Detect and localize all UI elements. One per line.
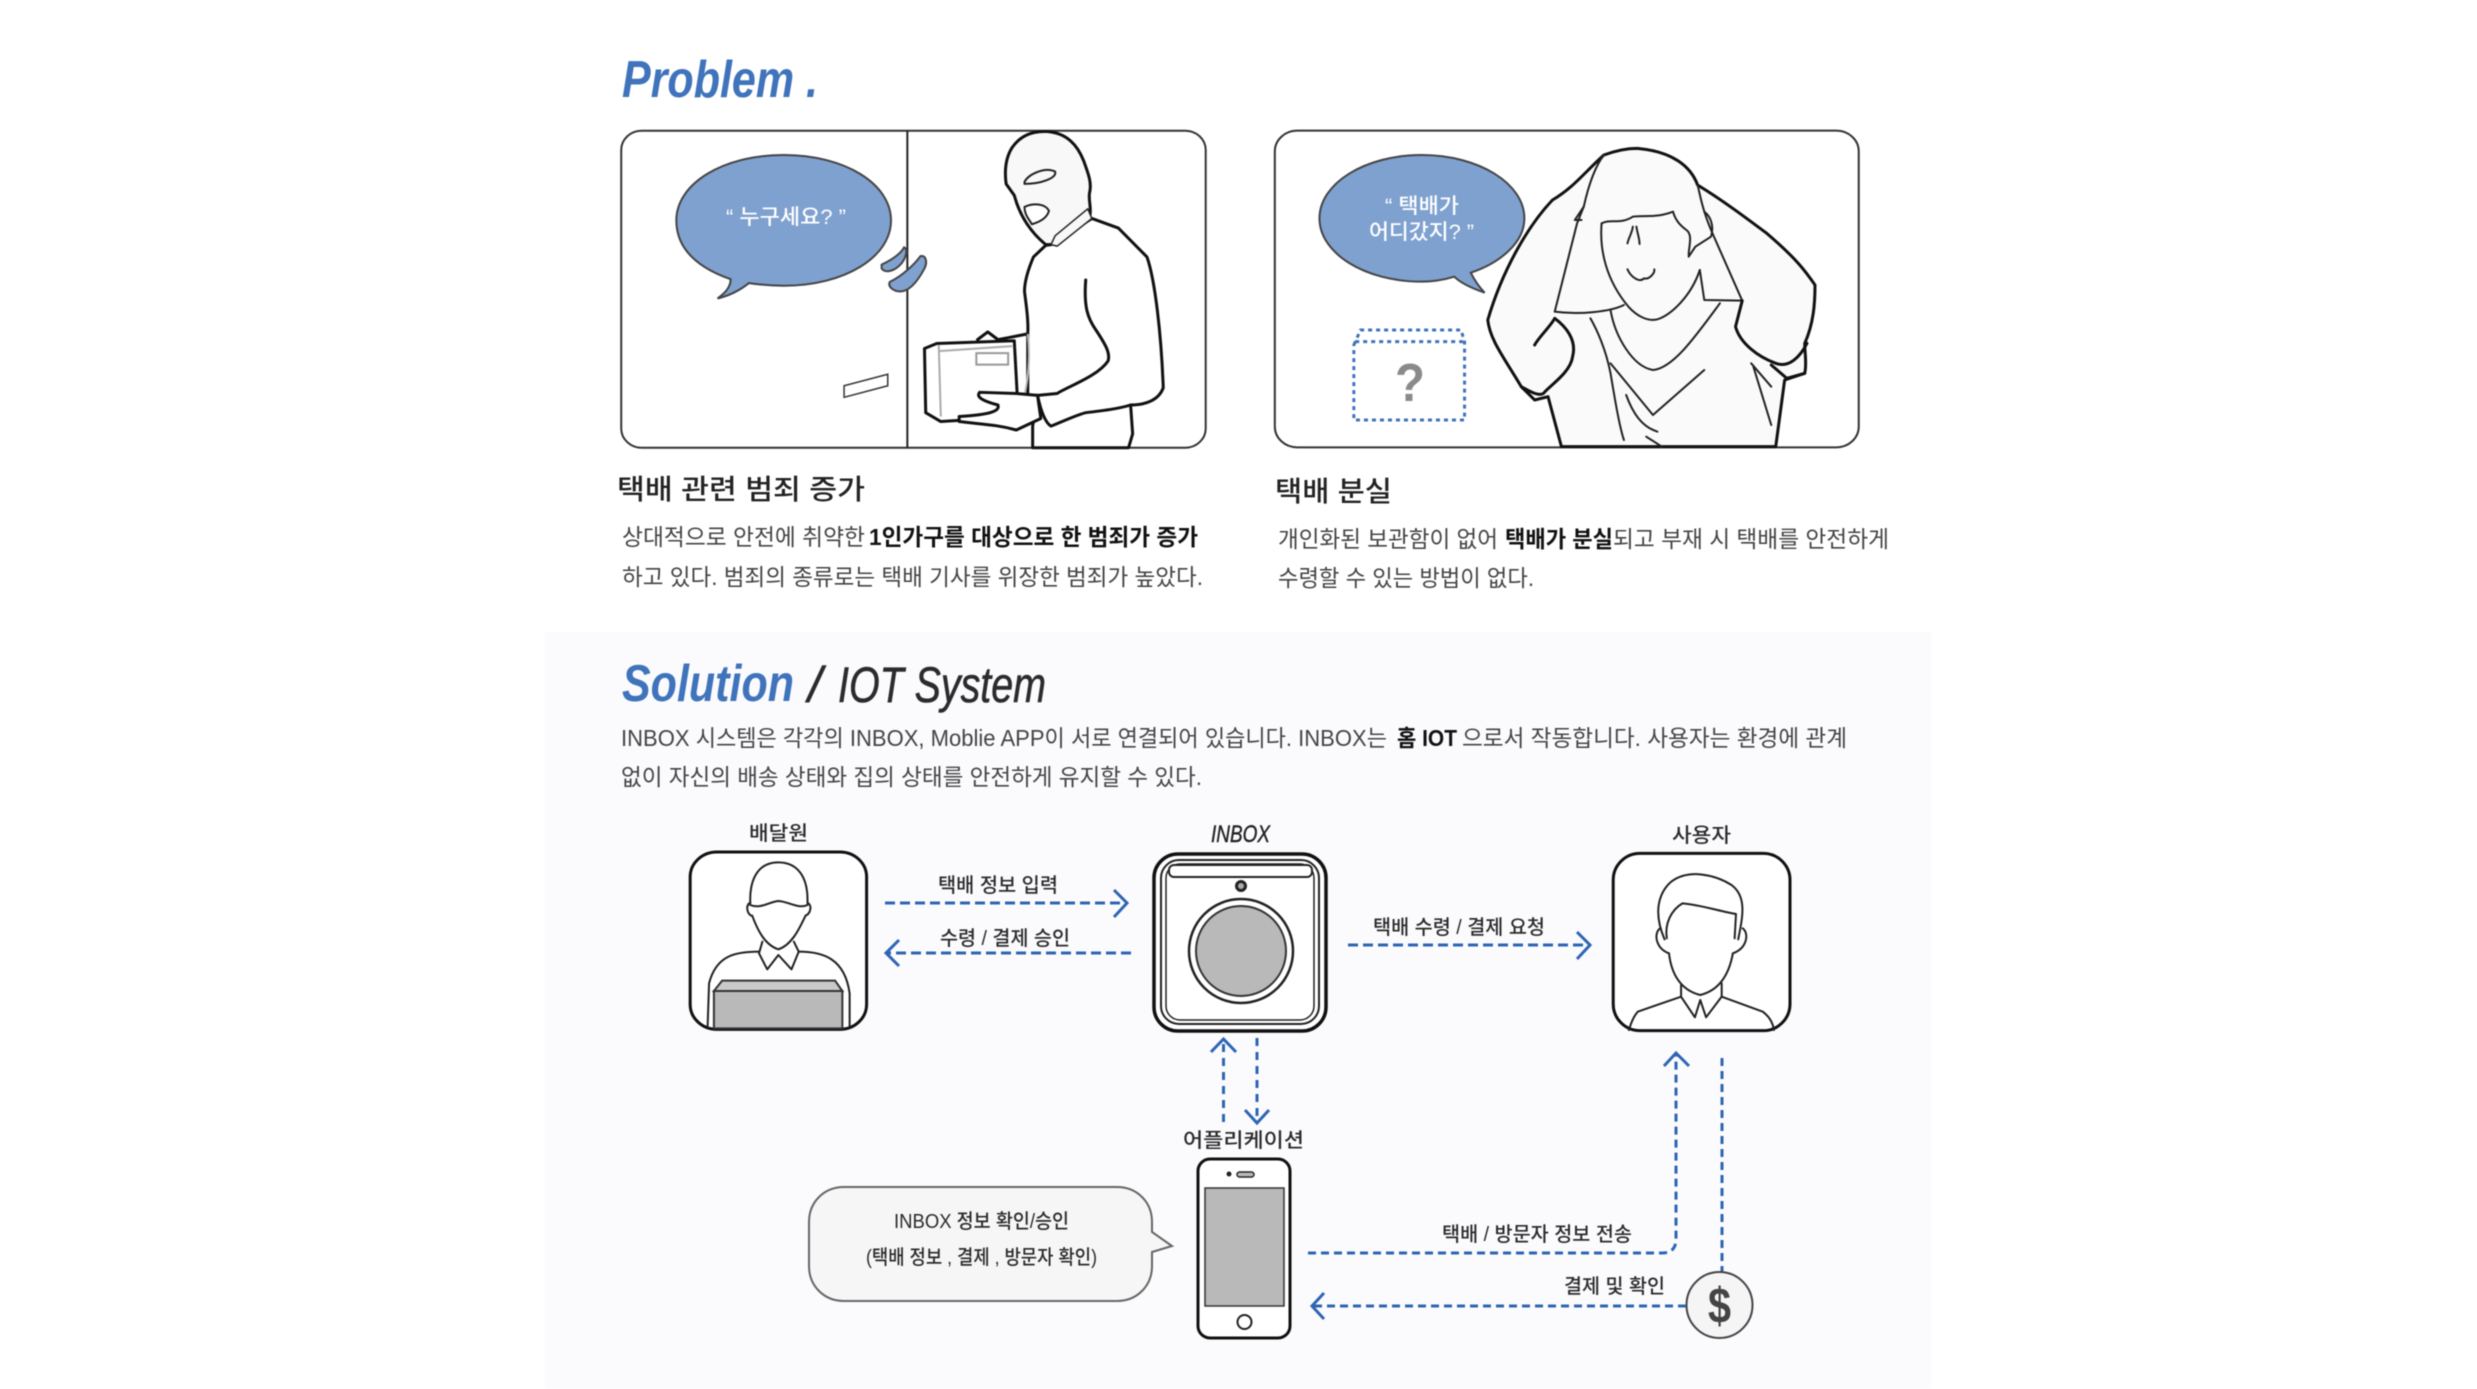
arrow: courier to INBOX	[885, 890, 1127, 917]
mail slot	[844, 374, 888, 397]
door handle	[882, 247, 926, 292]
text block: system description: 으로서 작동합니다. 사용자는 환경에 관계	[1462, 725, 1847, 751]
text block: parcel crime description	[622, 524, 1203, 590]
arrow: INBOX to app	[1245, 1038, 1269, 1123]
icon: INBOX device	[1154, 854, 1326, 1031]
speech text: where did it go: “ 택배가	[1385, 195, 1459, 218]
callout: app function	[809, 1187, 1172, 1301]
text block: system description: INBOX 시스템은 각각의 INBOX, Moblie APP이 서로 연결되어 있습니다. INBOX는	[621, 725, 1387, 751]
text block: parcel crime description: 1인가구를 대상으로 한 범죄가 증가	[869, 524, 1198, 550]
text block: lost parcel description: 되고 부재 시 택배를 안전하게	[1613, 526, 1889, 552]
label: application: 어플리케이션	[1183, 1129, 1304, 1152]
text block: lost parcel description: 수령할 수 있는 방법이 없다.	[1278, 565, 1534, 591]
icon: dollar coin: $	[1708, 1278, 1731, 1334]
title: Solution / IOT System	[622, 655, 1046, 713]
speech text: who is it: “ 누구세요? ”	[726, 206, 846, 229]
text block: lost parcel description: 개인화된 보관함이 없어	[1278, 526, 1498, 552]
title: Solution / IOT System: /	[805, 657, 827, 713]
arrow: INBOX to courier	[886, 940, 1131, 966]
heading: parcel crime increase: 택배 관련 범죄 증가	[617, 474, 865, 505]
masked man holding a parcel	[924, 131, 1163, 448]
panel: parcel crime illustration	[621, 131, 1206, 448]
arrow: INBOX to user	[1348, 932, 1590, 959]
icon: courier	[690, 852, 867, 1029]
callout: app function: INBOX 정보 확인/승인	[894, 1210, 1069, 1233]
callout: app function: (택배 정보 , 결제 , 방문자 확인)	[866, 1246, 1097, 1269]
heading: lost parcel: 택배 분실	[1275, 476, 1392, 507]
title: Solution / IOT System: Solution	[622, 655, 794, 713]
text block: parcel crime description: 상대적으로 안전에 취약한	[622, 524, 865, 550]
label: receipt / payment approval: 수령 / 결제 승인	[940, 927, 1070, 950]
arrow: payment to app	[1312, 1293, 1686, 1319]
text block: system description: 홈 IOT	[1397, 725, 1457, 751]
panel: lost parcel illustration	[1275, 131, 1859, 447]
icon: user	[1613, 853, 1790, 1031]
icon: question mark: ?	[1395, 353, 1425, 413]
icon: dollar coin	[1686, 1272, 1752, 1338]
text block: lost parcel description: 택배가 분실	[1505, 526, 1613, 552]
panel frame	[621, 131, 1206, 448]
text block: system description	[621, 725, 1847, 790]
label: parcel / visitor info sent: 택배 / 방문자 정보 전송	[1442, 1223, 1632, 1246]
speech bubble	[1319, 155, 1524, 293]
door edge	[906, 131, 908, 448]
label: user: 사용자	[1672, 824, 1731, 847]
text block: system description: 없이 자신의 배송 상태와 집의 상태를 안전하게 유지할 수 있다.	[621, 764, 1202, 790]
missing parcel dotted box	[1354, 330, 1465, 420]
label: parcel receipt / payment request: 택배 수령 / 결제 요청	[1373, 916, 1545, 939]
title: Problem: Problem .	[622, 51, 818, 109]
speech bubble	[676, 155, 891, 298]
text block: lost parcel description	[1278, 526, 1889, 591]
panel frame	[1275, 131, 1859, 447]
label: parcel info input: 택배 정보 입력	[938, 874, 1058, 897]
label: courier: 배달원	[749, 822, 808, 845]
label: payment and confirmation: 결제 및 확인	[1564, 1275, 1665, 1298]
title: Solution / IOT System: IOT System	[838, 657, 1046, 713]
text block: parcel crime description: 하고 있다. 범죄의 종류로는 택배 기사를 위장한 범죄가 높았다.	[622, 564, 1203, 590]
arrow: app to INBOX	[1211, 1039, 1236, 1122]
speech text: where did it go: 어디갔지? ”	[1369, 221, 1474, 244]
label: INBOX: INBOX	[1211, 821, 1271, 848]
speech text: where did it go	[1369, 195, 1474, 244]
worried man	[1488, 148, 1815, 447]
arrow: app to user	[1308, 1053, 1689, 1253]
panel: solution background	[545, 632, 1931, 1389]
arrow: user to payment	[1720, 1058, 1724, 1272]
icon: smartphone	[1198, 1159, 1290, 1338]
